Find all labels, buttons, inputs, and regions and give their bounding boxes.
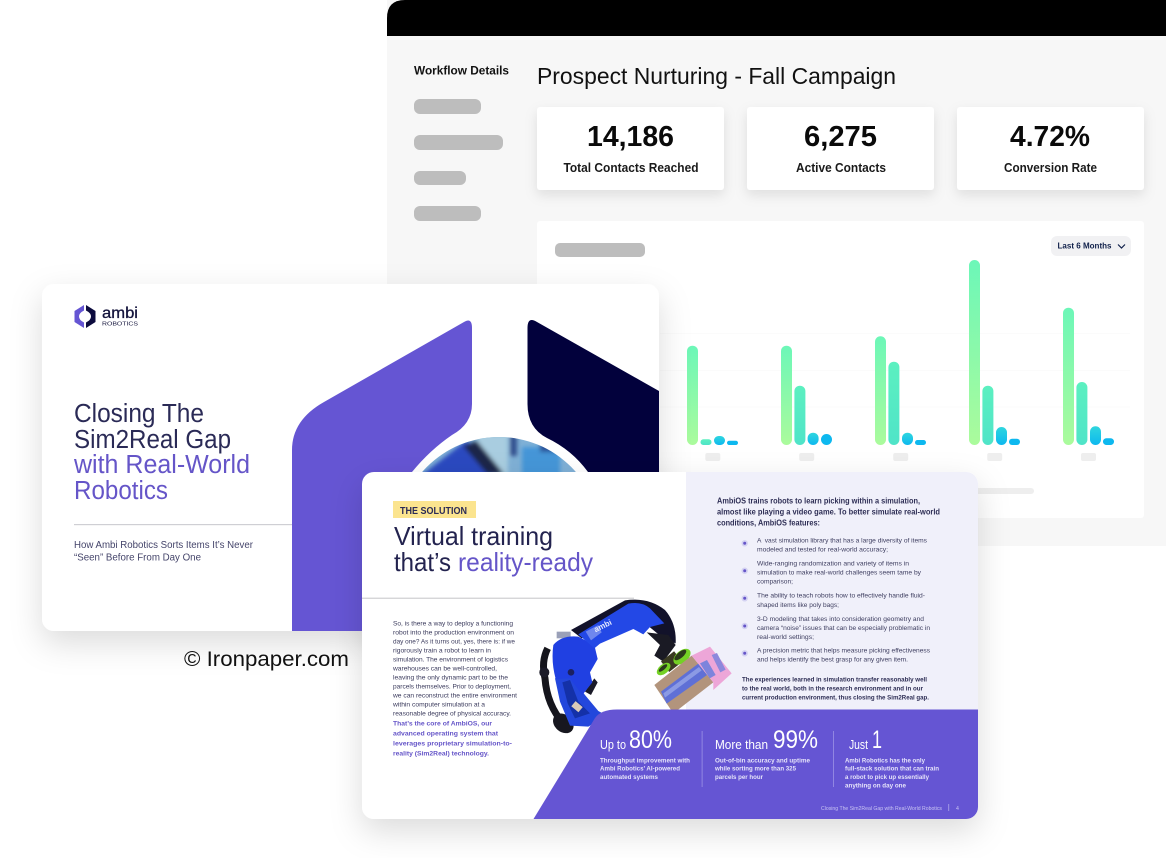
axis label placeholders — [705, 453, 1096, 461]
page footer: Closing The Sim2Real Gap with Real-World Robotics — [821, 806, 942, 812]
stat: 80%: Ambi Robotics’ AI-powered — [600, 766, 680, 773]
metric card: conversion rate: Conversion Rate — [1004, 161, 1097, 175]
logo: ambi — [102, 305, 138, 322]
body paragraph: rigorously train a robot to learn in — [393, 648, 491, 655]
cover subtitle: “Seen” Before From Day One — [74, 552, 202, 564]
highlighted paragraph: That’s the core of AmbiOS, our — [393, 720, 492, 728]
feature list — [757, 538, 931, 664]
cover title: with Real-World — [73, 451, 250, 479]
stat: just 1: full-stack solution that can train — [845, 766, 939, 773]
robot base — [549, 709, 578, 737]
feature list: shaped items like poly bags; — [757, 602, 839, 609]
body paragraph — [392, 621, 517, 718]
solution heading: reality-ready — [458, 547, 593, 577]
closing paragraph — [742, 676, 929, 701]
stat: 99%: More than — [715, 738, 768, 752]
page footer — [821, 804, 959, 812]
solution heading: Virtual training — [394, 521, 553, 551]
metric card: total contacts: Total Contacts Reached — [564, 161, 698, 175]
feature list: The ability to teach robots how to effectively handle fluid- — [757, 593, 925, 600]
chart scrollbar — [950, 488, 1034, 494]
feature list: real-world settings; — [757, 634, 814, 641]
cover shape: navy — [528, 320, 659, 472]
body paragraph: So, is there a way to deploy a functioning — [393, 621, 513, 628]
solution heading — [394, 521, 593, 577]
closing paragraph: to the real world, both in the research environment and in our — [742, 685, 923, 692]
body paragraph: robot into the production environment on — [393, 630, 514, 637]
feature list: and helps identify the best grasp for any given item. — [757, 657, 908, 664]
intro paragraph — [717, 496, 940, 528]
stat: 80%: automated systems — [600, 774, 658, 781]
dashboard heading: Prospect Nurturing - Fall Campaign — [537, 63, 896, 89]
metric card: conversion rate: 4.72% — [1010, 121, 1090, 153]
stat: 80%: 80% — [629, 726, 672, 754]
robot elbow joint — [585, 678, 598, 695]
feature bullets — [742, 540, 748, 656]
feature list: camera “noise” issues that can be especially problematic in — [757, 625, 930, 632]
stat: 99%: 99% — [773, 726, 818, 754]
cover photo: robot in circle — [422, 437, 576, 472]
metric card: conversion rate — [957, 107, 1144, 190]
highlighted paragraph — [393, 720, 512, 758]
robot arm illustration — [539, 600, 732, 737]
page footer: 4 — [956, 806, 959, 812]
body paragraph: leaving the only dynamic part to be the — [393, 675, 508, 682]
intro paragraph: conditions, AmbiOS features: — [717, 518, 820, 528]
stat: just 1 — [845, 726, 939, 789]
heading divider — [362, 598, 634, 599]
cover title: Sim2Real Gap — [74, 426, 231, 454]
metric card: active contacts: 6,275 — [804, 121, 877, 153]
metric card: total contacts: 14,186 — [587, 121, 674, 153]
robot shoulder — [553, 636, 598, 695]
body paragraph: within computer simulation at a — [392, 702, 485, 709]
panel: dashboard window — [387, 0, 1166, 546]
stat: just 1: a robot to pick up essentially — [845, 774, 929, 781]
stat: 80%: Throughput improvement with — [600, 757, 690, 764]
stat divider — [701, 731, 704, 787]
robot wrist — [647, 632, 676, 662]
cover subtitle — [74, 540, 254, 564]
robot arm illustration: ambi — [593, 618, 613, 634]
closing paragraph: The experiences learned in simulation transfer reasonably well — [742, 676, 927, 683]
robot rear link — [571, 600, 676, 643]
highlighted paragraph: reality (Sim2Real) technology. — [393, 750, 489, 758]
stat: just 1: 1 — [872, 726, 882, 754]
robot lower arm — [555, 675, 607, 727]
sidebar heading: Workflow Details — [414, 64, 509, 78]
cover title: Robotics — [74, 477, 168, 505]
stat: just 1: anything on day one — [845, 782, 906, 789]
intro paragraph: almost like playing a video game. To better simulate real-world — [717, 508, 940, 516]
panel: report cover — [42, 284, 659, 640]
panel: solution page — [362, 472, 978, 819]
highlighted paragraph: leverages proprietary simulation-to- — [393, 740, 512, 748]
body paragraph: simulation. The environment of logistics — [393, 657, 509, 664]
solution heading: that’s — [394, 547, 451, 577]
solution tag — [393, 501, 476, 518]
stat divider — [832, 731, 835, 787]
highlighted paragraph: advanced operating system that — [393, 730, 499, 738]
stat: 80% — [600, 726, 690, 781]
feature list: simulation to make real-world challenges seem tame by — [757, 569, 922, 576]
chart panel — [537, 221, 1144, 518]
copyright notice: © Ironpaper.com — [184, 648, 349, 671]
stat: 99% — [714, 726, 818, 781]
cover divider — [74, 524, 292, 525]
lavender column — [686, 472, 978, 712]
window title bar — [387, 0, 1166, 36]
stat: 99%: while sorting more than 325 — [714, 766, 796, 773]
feature list: comparison; — [757, 579, 793, 586]
stat: 99%: Out-of-bin accuracy and uptime — [715, 757, 810, 764]
body paragraph: parcels themselves. Prior to deployment, — [393, 684, 511, 691]
metric card: active contacts — [747, 107, 934, 190]
body paragraph: warehouses can be well-controlled, — [392, 666, 497, 673]
feature list: A vast simulation library that has a large diversity of items — [757, 538, 928, 545]
feature list: Wide-ranging randomization and variety of items in — [757, 560, 909, 567]
body paragraph: day one? As it turns out, yes, there is: if we — [393, 639, 515, 646]
feature list: modeled and tested for real-world accuracy; — [757, 547, 888, 554]
stat: 80%: Up to — [600, 738, 626, 752]
metric card: total contacts — [537, 107, 724, 190]
metric card: active contacts: Active Contacts — [796, 161, 886, 175]
robot upper arm — [578, 603, 664, 648]
sidebar placeholder items — [414, 99, 503, 221]
logo: ROBOTICS — [102, 322, 138, 328]
cover title: Closing The — [74, 400, 204, 428]
robot cable — [543, 648, 563, 723]
feature list: A precision metric that helps measure picking effectiveness — [757, 648, 931, 655]
logo — [74, 305, 138, 328]
cover shape: purple — [292, 320, 472, 640]
robot parcel — [654, 647, 732, 713]
robot mount — [557, 632, 571, 638]
robot gripper — [655, 646, 694, 678]
chart title placeholder — [555, 243, 645, 257]
date range dropdown: Last 6 Months — [1058, 242, 1112, 250]
bar chart — [687, 260, 1114, 445]
body paragraph: we can reconstruct the entire environment — [392, 693, 517, 700]
stat: just 1: Just — [849, 738, 868, 752]
cover subtitle: How Ambi Robotics Sorts Items It’s Never — [74, 540, 254, 551]
intro paragraph: AmbiOS trains robots to learn picking within a simulation, — [717, 496, 920, 506]
stat: just 1: Ambi Robotics has the only — [845, 757, 925, 764]
solution tag: THE SOLUTION — [400, 506, 467, 517]
cover title — [73, 400, 250, 505]
stat: 99%: parcels per hour — [715, 774, 763, 781]
body paragraph: reasonable degree of physical accuracy. — [393, 711, 511, 718]
date range dropdown — [1051, 236, 1131, 256]
closing paragraph: current production environment, thus closing the Sim2Real gap. — [742, 694, 929, 701]
purple stats band — [534, 710, 978, 819]
feature list: 3-D modeling that takes into consideration geometry and — [757, 616, 924, 623]
